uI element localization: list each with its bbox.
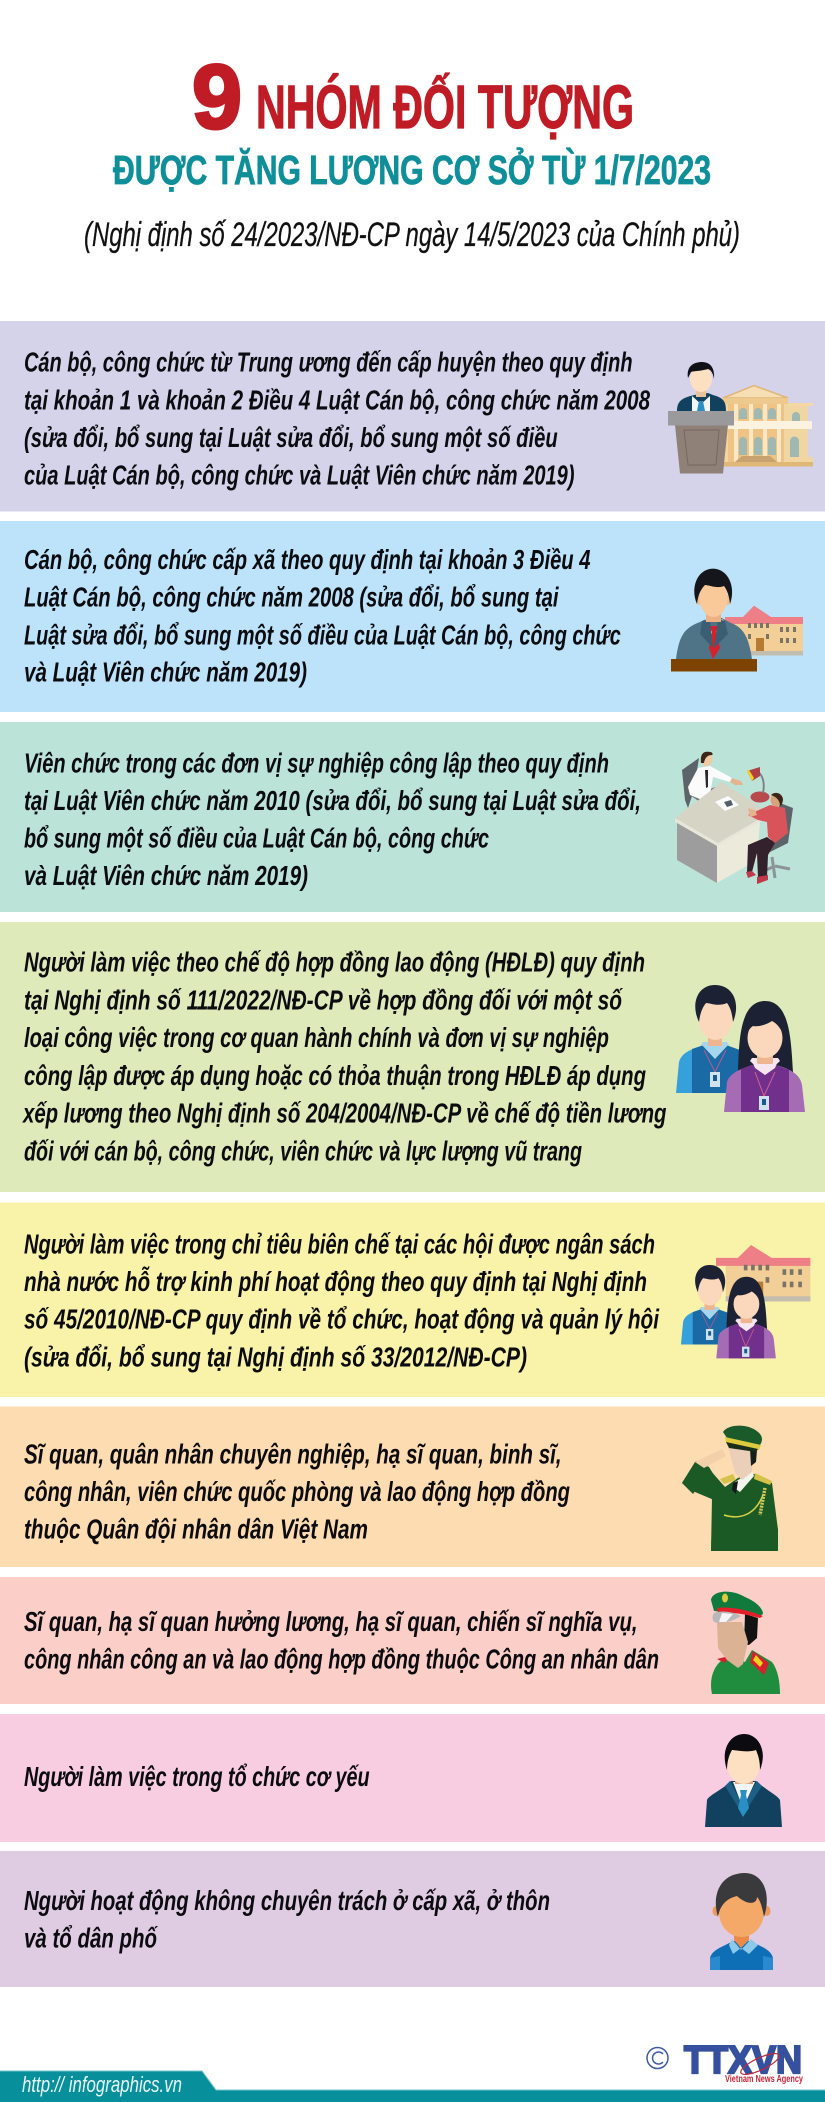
panel: group 6: [0, 1406, 825, 1567]
text: group 4: loại công việc trong cơ quan hành chính và đơn vị sự nghiệp: [24, 1022, 609, 1053]
text: group 1: (sửa đổi, bổ sung tại Luật sửa đổi, bổ sung một số điều: [24, 422, 558, 453]
icon: commune official with building: [671, 569, 803, 672]
title block: [84, 47, 740, 254]
panel: group 3: [0, 722, 825, 912]
text: group 6: [24, 1438, 570, 1545]
panel: group 7: [0, 1577, 825, 1704]
text: group 3: Viên chức trong các đơn vị sự nghiệp công lập theo quy định: [24, 747, 609, 778]
panel: group 4: [0, 922, 825, 1192]
text: group 2: và Luật Viên chức năm 2019): [24, 657, 307, 688]
icon: official at podium with building: [668, 362, 813, 474]
text: group 2: Cán bộ, công chức cấp xã theo quy định tại khoản 3 Điều 4: [24, 544, 590, 575]
icon: police officer: [711, 1592, 780, 1694]
text: group 2: [24, 544, 621, 688]
globe swoosh: [738, 2050, 782, 2078]
footer url: http:// infographics.vn: [22, 2072, 182, 2097]
text: group 3: và Luật Viên chức năm 2019): [24, 860, 308, 891]
title: red heading: NHÓM ĐỐI TƯỢNG: [256, 73, 634, 141]
icon: saluting soldier: [682, 1426, 778, 1551]
TTXVN wordmark: TTXVN: [684, 2039, 802, 2082]
text: group 6: thuộc Quân đội nhân dân Việt Nam: [24, 1514, 368, 1545]
text: group 6: công nhân, viên chức quốc phòng và lao động hợp đồng: [24, 1476, 570, 1507]
text: group 3: bổ sung một số điều của Luật Cán bộ, công chức: [24, 823, 489, 854]
icon: man and woman with ID badges: [676, 985, 805, 1112]
text: group 4: tại Nghị định số 111/2022/NĐ-CP về hợp đồng đối với một số: [24, 984, 624, 1015]
text: group 9: và tổ dân phố: [24, 1922, 159, 1953]
text: group 5: (sửa đổi, bổ sung tại Nghị định số 33/2012/NĐ-CP): [24, 1341, 527, 1372]
icon: staff pair with building: [681, 1245, 810, 1358]
panel: group 9: [0, 1851, 825, 1987]
icon: young man in blue shirt: [710, 1873, 773, 1970]
icon: two people at a desk: [675, 752, 793, 884]
panel: group 1: [0, 321, 825, 512]
text: group 3: [24, 747, 641, 891]
footer bar: [0, 2071, 825, 2102]
text: group 7: [24, 1606, 659, 1675]
panel: group 5: [0, 1202, 825, 1397]
text: group 4: đối với cán bộ, công chức, viên chức và lực lượng vũ trang: [24, 1135, 582, 1166]
text: group 2: Luật Cán bộ, công chức năm 2008 (sửa đổi, bổ sung tại: [24, 582, 559, 613]
text: group 1: của Luật Cán bộ, công chức và Luật Viên chức năm 2019): [24, 459, 574, 490]
logo: copyright and TTXVN: [647, 2039, 803, 2085]
icon: man in suit: [705, 1734, 782, 1827]
title: number 9: 9: [192, 47, 242, 148]
text: group 5: [24, 1228, 660, 1372]
text: group 1: [24, 347, 651, 490]
text: group 9: Người hoạt động không chuyên trách ở cấp xã, ở thôn: [24, 1885, 550, 1916]
text: group 8: Người làm việc trong tổ chức cơ yếu: [24, 1761, 370, 1792]
copyright symbol: [647, 2048, 668, 2068]
panel: group 8: [0, 1714, 825, 1842]
text: group 6: Sĩ quan, quân nhân chuyên nghiệp, hạ sĩ quan, binh sĩ,: [24, 1438, 562, 1469]
panel: group 2: [0, 521, 825, 712]
text: group 9: [24, 1885, 550, 1953]
text: group 4: [22, 947, 667, 1166]
